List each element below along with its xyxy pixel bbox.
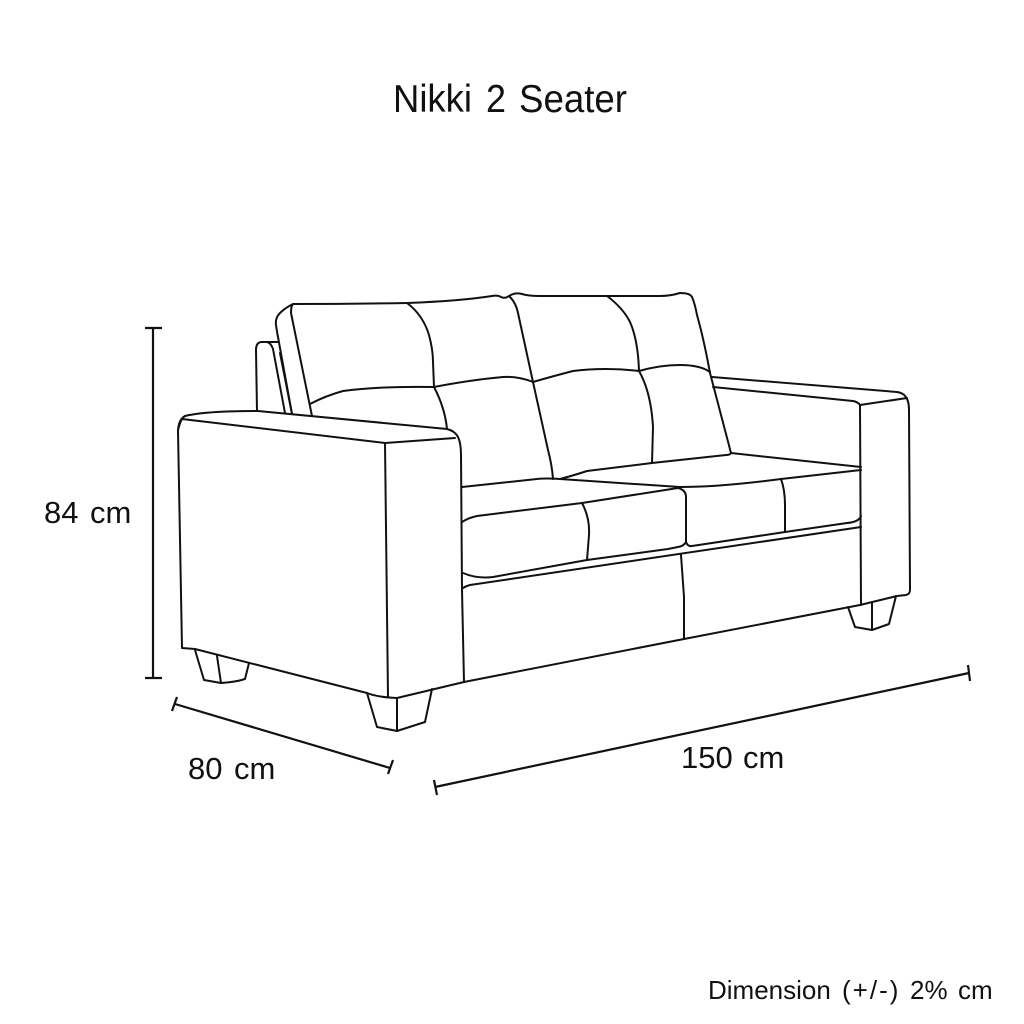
depth label: 80: [188, 751, 222, 786]
back frame behind cushion: [256, 342, 292, 414]
tolerance note: (+/-): [842, 975, 900, 1005]
tolerance note: Dimension: [708, 975, 831, 1005]
depth label: cm: [234, 751, 275, 786]
height label: cm: [90, 495, 131, 530]
height label: 84: [44, 495, 78, 530]
title: Nikki: [393, 78, 472, 121]
base rail and seam: [463, 527, 861, 639]
legs: [195, 596, 896, 731]
base outline: [195, 377, 910, 698]
depth dimension line: [172, 697, 393, 774]
height dimension line: [145, 328, 162, 678]
width label: 150: [681, 740, 733, 775]
left arm: [178, 411, 464, 697]
width dimension line: [434, 665, 970, 795]
sofa line drawing: [178, 293, 910, 731]
title: [393, 78, 627, 121]
seat cushions: [462, 453, 861, 578]
tolerance note: 2%: [910, 975, 948, 1005]
title: 2: [486, 78, 506, 121]
title: Seater: [519, 78, 627, 121]
width label: cm: [743, 740, 784, 775]
back cushions: [276, 293, 731, 479]
tolerance note: cm: [958, 975, 993, 1005]
right arm: [713, 387, 907, 605]
